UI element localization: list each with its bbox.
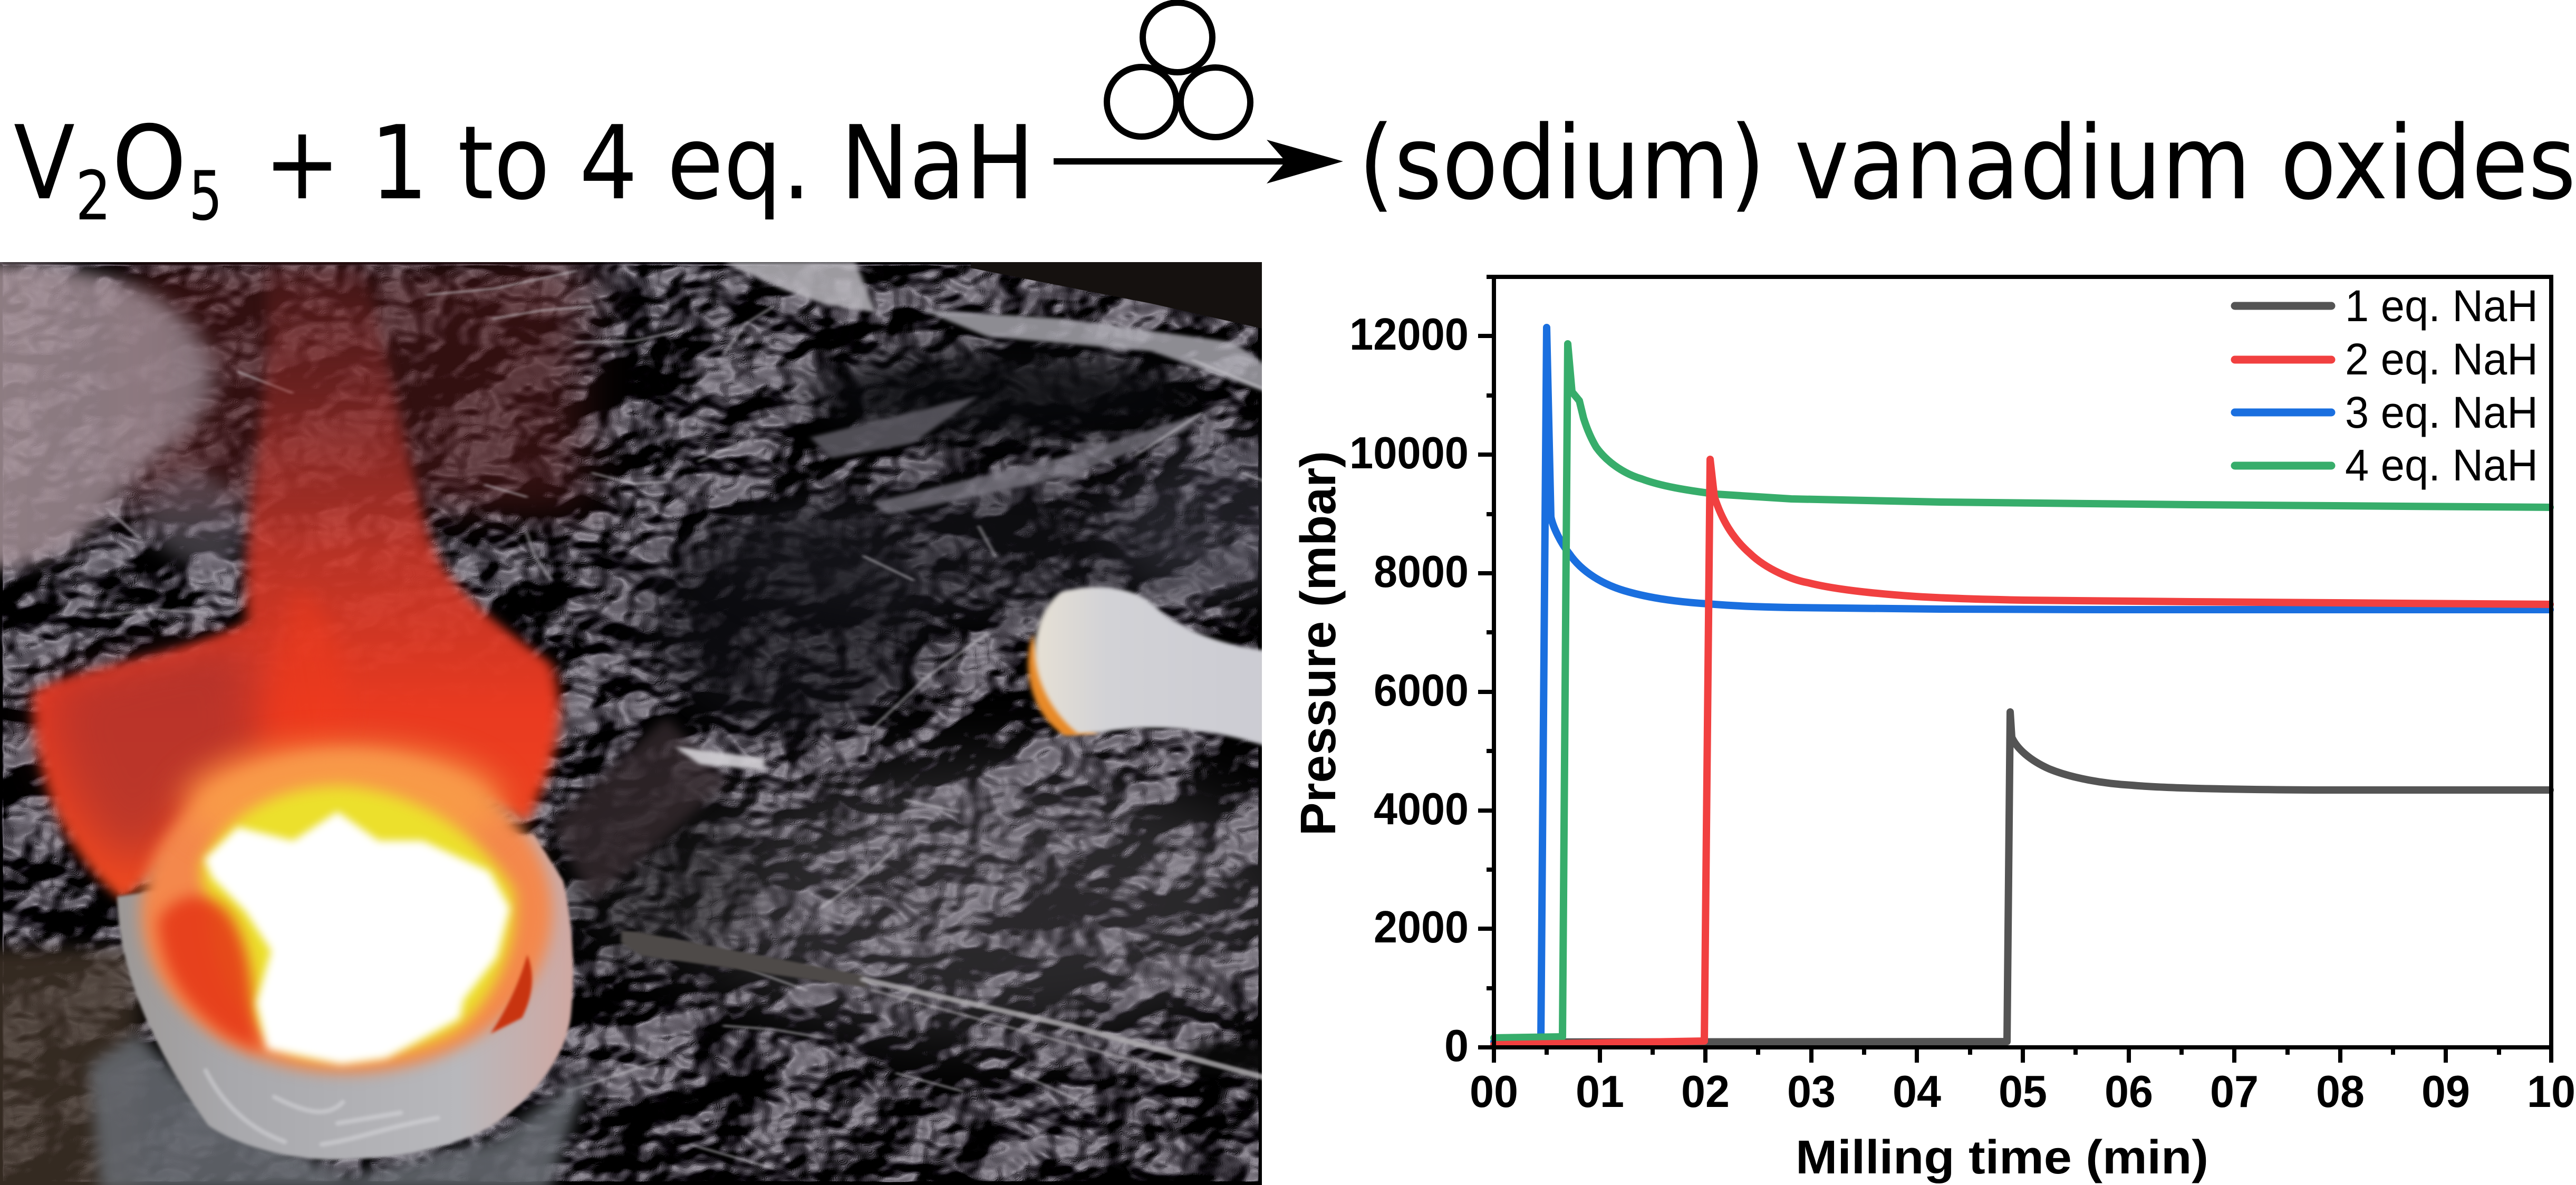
icon: three milling balls [1107, 3, 1250, 137]
mortar body [117, 834, 573, 1160]
reactant V2O5 [14, 104, 223, 236]
line: 3 eq. NaH [1494, 327, 2550, 1042]
mortar with burning contents [90, 746, 590, 1185]
x axis ticks [1494, 1047, 2551, 1063]
pestle [1028, 587, 1276, 749]
spatula handle [621, 931, 868, 988]
legend [2235, 281, 2538, 490]
foil highlights top [674, 262, 1276, 770]
x axis labels: 09 [2421, 1067, 2470, 1117]
legend entry: 4 eq. NaH: 4 eq. NaH [2345, 440, 2538, 490]
data lines [1494, 327, 2550, 1045]
chart: pressure vs milling time [1290, 277, 2575, 1184]
y axis labels: 6000 [1374, 666, 1469, 716]
y axis labels: 12000 [1349, 310, 1469, 360]
x axis labels: 10 [2527, 1067, 2575, 1117]
y axis ticks [1478, 277, 1494, 1047]
crumpled foil background [0, 262, 1262, 1185]
spatula blade [864, 979, 1276, 1081]
x axis labels: 07 [2210, 1067, 2259, 1117]
x axis labels: 02 [1681, 1067, 1730, 1117]
red lower-left interior [158, 896, 261, 1052]
reactant V2O5: 5 [189, 157, 223, 236]
white hot core [205, 812, 510, 1064]
smoke [0, 262, 247, 574]
cloth under mortar [90, 1034, 590, 1185]
flame [33, 265, 559, 901]
legend entry: 3 eq. NaH: 3 eq. NaH [2345, 388, 2538, 437]
line: 1 eq. NaH [1494, 712, 2550, 1042]
hot rim [141, 752, 552, 1073]
reactant V2O5: V [14, 104, 75, 223]
axes frame [1494, 277, 2551, 1047]
foil wrinkle lines [99, 271, 1275, 1169]
x axis labels: 01 [1576, 1067, 1624, 1117]
reaction arrow [1054, 140, 1343, 184]
photo: burning reaction in mortar on crumpled foil [0, 253, 1316, 1185]
line: 4 eq. NaH [1494, 344, 2550, 1038]
mortar highlights [206, 1071, 438, 1144]
y axis labels [1349, 310, 1469, 1071]
y axis labels: 0 [1444, 1021, 1469, 1071]
y axis title: Pressure (mbar) [1290, 451, 1346, 836]
x axis labels: 05 [1999, 1067, 2047, 1117]
y axis labels: 10000 [1349, 428, 1469, 478]
legend entry: 2 eq. NaH: 2 eq. NaH [2345, 334, 2538, 384]
reactant NaH text: + 1 to 4 eq. NaH [264, 104, 1035, 223]
reactant V2O5: 2 [75, 157, 111, 236]
x axis labels: 08 [2316, 1067, 2365, 1117]
line: 2 eq. NaH [1494, 459, 2550, 1045]
y axis labels: 4000 [1374, 784, 1469, 834]
black background corner [970, 262, 1262, 329]
x axis labels [1470, 1067, 2575, 1117]
dark strip next to mortar [551, 717, 728, 901]
title: reaction equation [14, 3, 2576, 236]
x axis labels: 04 [1893, 1067, 1941, 1117]
inner yellow glow [200, 786, 515, 1059]
dark red crack right [490, 955, 532, 1034]
foil tone patches [0, 262, 1316, 1185]
reactant V2O5: O [112, 104, 187, 223]
orange glow above core [185, 746, 501, 857]
x axis labels: 06 [2105, 1067, 2153, 1117]
legend entry: 1 eq. NaH: 1 eq. NaH [2345, 281, 2538, 331]
x axis labels: 00 [1470, 1067, 1518, 1117]
y axis labels: 2000 [1374, 902, 1469, 952]
y axis labels: 8000 [1374, 547, 1469, 597]
x axis labels: 03 [1787, 1067, 1836, 1117]
x axis title: Milling time (min) [1796, 1131, 2208, 1184]
